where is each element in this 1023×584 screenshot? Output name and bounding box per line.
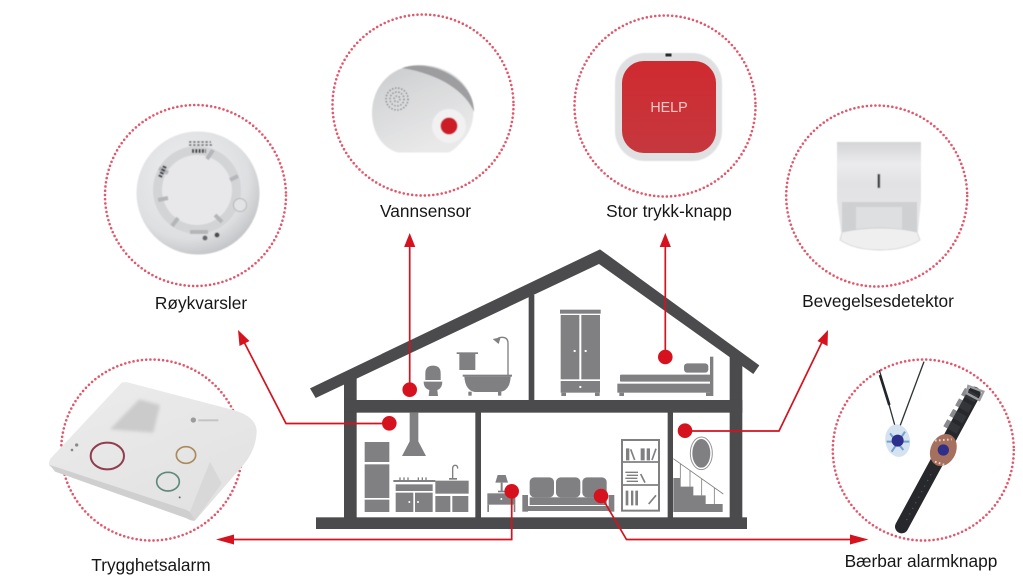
- panel: Trygghetsalarm: [49, 360, 257, 575]
- icon: alarm base station: [49, 382, 257, 521]
- icon: help button: HELP: [650, 100, 688, 116]
- icon: pendant and wrist alarm: [879, 362, 983, 527]
- arrow: Vannsensor: [402, 233, 417, 397]
- house cross-section: [310, 249, 759, 529]
- panel: Bærbar alarmknapp: [833, 360, 1014, 571]
- icon: smoke detector: [136, 132, 260, 254]
- icon: toilet: [424, 366, 442, 396]
- icon: fridge: [365, 442, 389, 512]
- icon: lamp and nightstand: [487, 475, 515, 512]
- icon: sofa: [522, 477, 614, 512]
- panel: Vannsensor: [332, 14, 514, 221]
- arrow: Stor trykk-knapp: [658, 233, 673, 364]
- icon: wardrobe: [560, 310, 601, 396]
- icon: mirror: [690, 437, 712, 470]
- label: Røykvarsler: Røykvarsler: [155, 293, 247, 313]
- dotted circle: Røykvarsler: [105, 105, 286, 286]
- icon: bathtub and shower: [457, 337, 512, 396]
- dotted circle: Bærbar alarmknapp: [833, 360, 1014, 540]
- dotted circle: Bevegelsesdetektor: [786, 106, 967, 286]
- dotted circle: Vannsensor: [332, 14, 514, 196]
- label: Trygghetsalarm: Trygghetsalarm: [91, 555, 211, 575]
- label: Vannsensor: Vannsensor: [380, 201, 471, 221]
- icon: kitchen hood: [402, 412, 426, 456]
- panel: Bevegelsesdetektor: [786, 106, 967, 311]
- panel: Røykvarsler: [105, 105, 286, 313]
- arrow: Bærbar alarmknapp: [594, 489, 868, 544]
- icon: staircase: [673, 459, 723, 512]
- icon: bookshelf: [622, 440, 659, 511]
- icon: water sensor: [372, 65, 474, 152]
- arrow: Røykvarsler: [238, 330, 397, 431]
- label: Bevegelsesdetektor: Bevegelsesdetektor: [802, 291, 954, 311]
- panel: Stor trykk-knapp: [574, 16, 756, 221]
- house structure: [310, 249, 759, 529]
- label: Stor trykk-knapp: Stor trykk-knapp: [606, 201, 732, 221]
- arrow: Trygghetsalarm: [216, 484, 519, 544]
- label: Bærbar alarmknapp: Bærbar alarmknapp: [845, 551, 997, 571]
- icon: help button: [615, 53, 722, 161]
- icon: motion detector: [837, 142, 921, 250]
- arrow: Bevegelsesdetektor: [678, 330, 828, 438]
- icon: bed: [617, 357, 713, 396]
- dotted circle: Trygghetsalarm: [61, 360, 242, 540]
- dotted circle: Stor trykk-knapp: [574, 16, 756, 196]
- icon: kitchen counter and sink: [393, 465, 469, 512]
